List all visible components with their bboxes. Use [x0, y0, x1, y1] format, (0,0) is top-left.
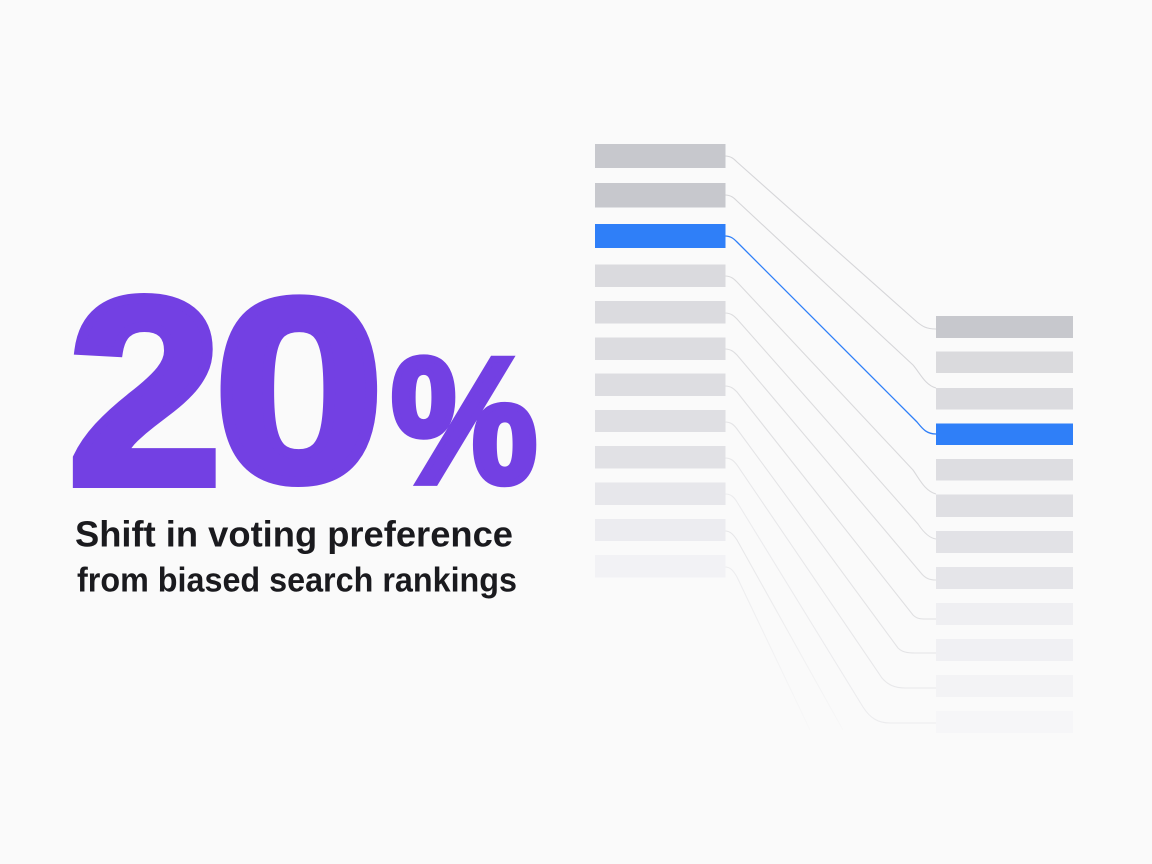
connector 4 — [725, 276, 936, 494]
left bar 6 — [595, 338, 726, 360]
caption line 2: from biased search rankings — [77, 562, 517, 600]
left ranking column — [595, 144, 726, 578]
right bar 3 — [936, 388, 1073, 410]
digit 0: 0 — [214, 246, 384, 534]
left bar 1 — [595, 144, 726, 168]
left bar 7 — [595, 374, 726, 396]
right bar 1 — [936, 316, 1073, 338]
left bar 3 highlighted — [595, 224, 726, 248]
connector 12 — [725, 567, 810, 730]
percent sign: % — [391, 321, 537, 521]
caption — [75, 514, 517, 600]
right ranking column — [936, 316, 1073, 733]
right bar 7 — [936, 531, 1073, 553]
left bar 11 — [595, 519, 726, 541]
right bar 9 — [936, 603, 1073, 625]
connector 11 — [725, 531, 843, 730]
right bar 2 — [936, 352, 1073, 373]
digit 2: 2 — [68, 245, 221, 540]
left bar 5 — [595, 301, 726, 324]
right bar 10 — [936, 639, 1073, 661]
right bar 6 — [936, 494, 1073, 517]
connector 8 — [725, 422, 936, 653]
left bar 10 — [595, 482, 726, 505]
connector 6 — [725, 349, 936, 580]
left bar 4 — [595, 264, 726, 287]
left bar 8 — [595, 410, 726, 432]
connector 10 — [725, 494, 936, 723]
right bar 12 — [936, 711, 1073, 733]
big statistic: 20% — [68, 245, 537, 540]
connector 1 — [725, 156, 936, 329]
connector lines between rankings — [725, 156, 936, 730]
left bar 9 — [595, 446, 726, 468]
highlighted connector — [725, 236, 936, 434]
left bar 12 — [595, 555, 726, 578]
connector 5 — [725, 313, 936, 539]
caption line 1: Shift in voting preference — [75, 514, 513, 554]
connector 7 — [725, 386, 936, 619]
right bar 8 — [936, 567, 1073, 589]
connector 2 — [725, 195, 936, 388]
right bar 11 — [936, 675, 1073, 697]
left bar 2 — [595, 183, 726, 208]
right bar 4 highlighted — [936, 424, 1073, 445]
connector 9 — [725, 458, 936, 688]
right bar 5 — [936, 459, 1073, 480]
